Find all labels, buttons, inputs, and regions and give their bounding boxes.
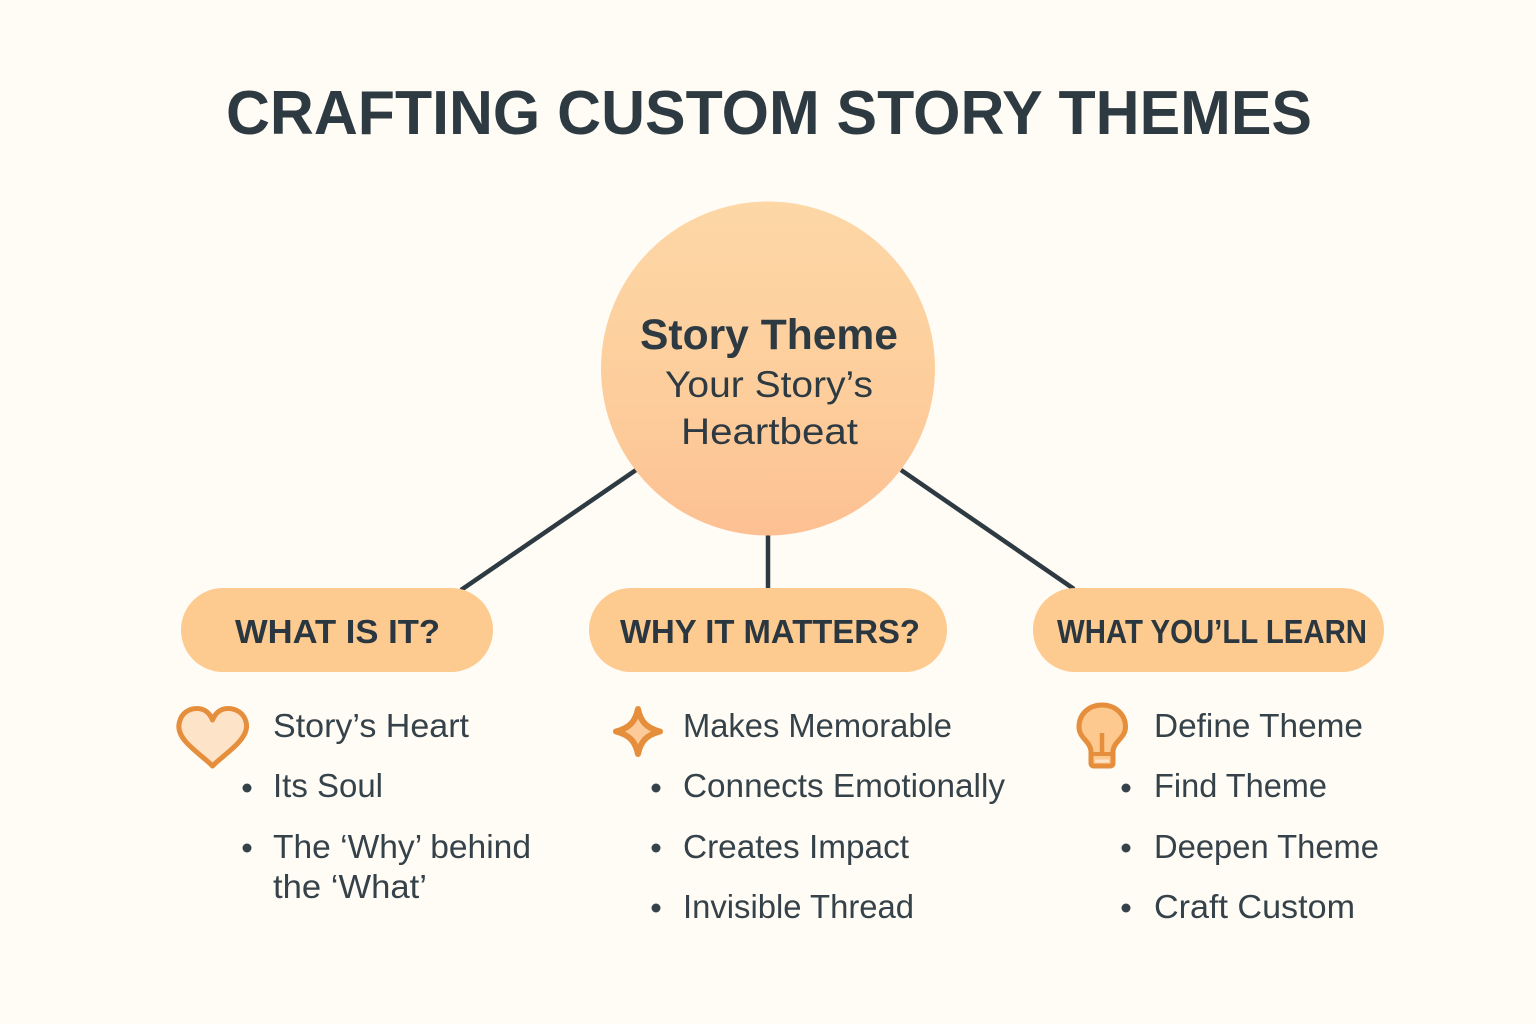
pill heading: why it matters: WHY IT MATTERS? [620,613,920,650]
list item: Story’s Heart [273,707,469,744]
bullet item: creates impact: Creates Impact [683,828,909,865]
list item: Makes Memorable [683,707,952,744]
connector: center to What You'll Learn [901,470,1074,589]
panel: what you'll learn [1033,588,1384,925]
icon: heart [179,708,247,766]
icon: light bulb [1079,705,1126,766]
central circle: story theme [601,202,935,536]
bullet item: invisible thread: Invisible Thread [683,888,914,925]
pill heading: what you'll learn [1033,588,1384,672]
bullet item: the why behind the what: the ‘What’ [273,868,427,905]
bullet item: its soul: Its Soul [273,767,383,804]
icon: sparkle [616,709,660,754]
bullet item: craft custom: Craft Custom [1154,888,1355,925]
title: CRAFTING CUSTOM STORY THEMES [226,79,1312,148]
bullet item: the why behind the what: The ‘Why’ behind [273,828,531,865]
bullet item: deepen theme: Deepen Theme [1154,828,1379,865]
bullet item: connects emotionally: Connects Emotionally [683,767,1006,804]
bullet item: find theme: Find Theme [1154,767,1327,804]
pill heading: what is it: WHAT IS IT? [235,613,440,650]
circle subtitle line 1: Your Story’s [665,364,873,405]
bullet item: the why behind the what [242,828,531,905]
connector: center to Why It Matters [766,532,770,588]
connector: center to What Is It [461,470,636,590]
panel: why it matters [589,588,1006,925]
list item: Define Theme [1154,707,1363,744]
pill heading: why it matters [589,588,947,672]
panel: what is it [179,588,531,905]
pill heading: what is it [181,588,493,672]
pill heading: what you'll learn: WHAT YOU’LL LEARN [1057,613,1367,650]
circle subtitle line 2: Heartbeat [681,411,859,452]
circle heading: Story Theme [640,311,898,359]
